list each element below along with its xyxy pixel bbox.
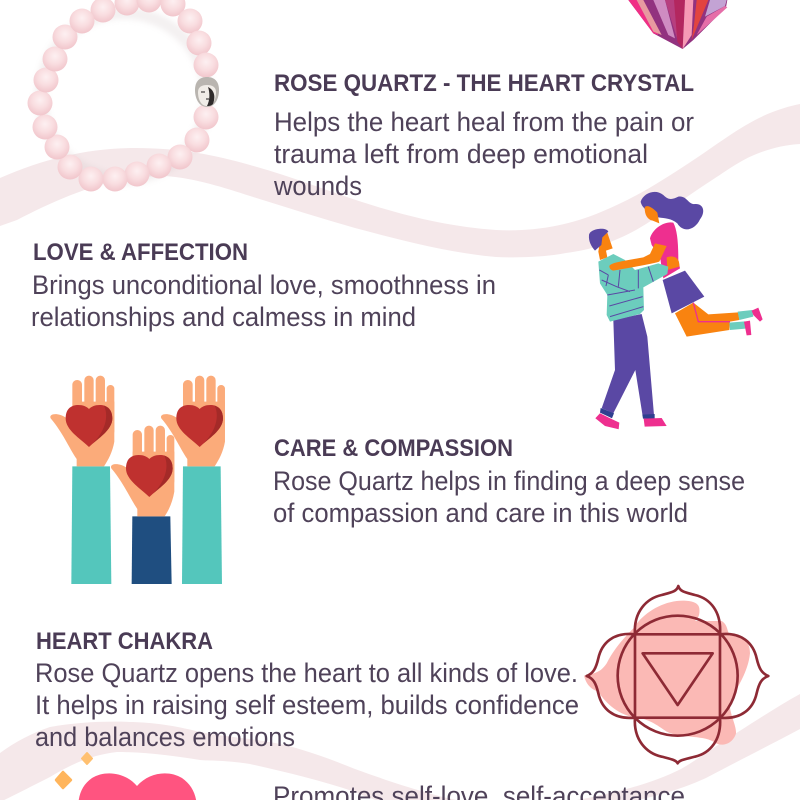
woman torso xyxy=(650,222,680,278)
icon: sparkle large xyxy=(56,772,71,788)
buddha charm xyxy=(195,77,219,107)
text: care and compassion description: Rose Quartz helps in finding a deep sense xyxy=(273,466,745,496)
woman skirt xyxy=(663,271,704,313)
woman face xyxy=(645,206,659,223)
heading: heart chakra: HEART CHAKRA xyxy=(36,628,213,655)
chakra outline xyxy=(587,586,768,763)
text: rose quartz description: wounds xyxy=(273,171,362,201)
text: heart chakra description: Rose Quartz opens the heart to all kinds of love. xyxy=(35,658,578,688)
text: love and affection description: relationships and calmess in mind xyxy=(31,302,416,332)
text: heart chakra description xyxy=(35,658,579,752)
crystal icon xyxy=(628,0,727,49)
text: love and affection description: Brings unconditional love, smoothness in xyxy=(32,270,496,300)
chakra pink blot xyxy=(584,601,750,745)
woman hair xyxy=(641,192,703,229)
hearts xyxy=(66,405,112,447)
wave band: upper xyxy=(0,104,800,257)
icon: embracing couple xyxy=(589,192,763,429)
bracelet shadow xyxy=(41,13,207,179)
icon: sparkle small xyxy=(82,753,92,764)
man trousers xyxy=(602,314,654,416)
icon: hands holding hearts xyxy=(50,376,225,584)
man head xyxy=(598,233,613,260)
bracelet beads xyxy=(28,0,218,192)
wave band: lower xyxy=(0,694,800,800)
woman arm xyxy=(609,243,667,271)
heading: rose quartz: ROSE QUARTZ - THE HEART CRYSTAL xyxy=(274,70,694,97)
heart shading xyxy=(89,406,223,497)
text: care and compassion description: of compassion and care in this world xyxy=(273,498,688,528)
heading: care and compassion: CARE & COMPASSION xyxy=(274,435,513,462)
text: rose quartz description: trauma left from deep emotional xyxy=(274,139,648,169)
text: love and affection description xyxy=(31,270,496,332)
text: heart chakra description: and balances emotions xyxy=(35,722,295,752)
right hand xyxy=(161,376,225,466)
woman legs xyxy=(675,303,739,337)
bracelet image xyxy=(28,0,219,192)
left hand xyxy=(50,376,114,466)
text: heart chakra description: It helps in raising self esteem, builds confidence xyxy=(35,690,579,720)
sleeves xyxy=(71,466,111,584)
text: care and compassion description xyxy=(273,466,745,528)
icon: pink heart xyxy=(78,773,197,800)
text: rose quartz description: Helps the heart heal from the pain or xyxy=(274,107,694,137)
man sweater xyxy=(598,254,668,322)
woman hand on back xyxy=(667,256,679,270)
heading: love and affection: LOVE & AFFECTION xyxy=(33,239,248,266)
icon: chakra symbol xyxy=(584,586,768,763)
text: rose quartz description xyxy=(273,107,694,201)
centre hand xyxy=(111,426,174,516)
